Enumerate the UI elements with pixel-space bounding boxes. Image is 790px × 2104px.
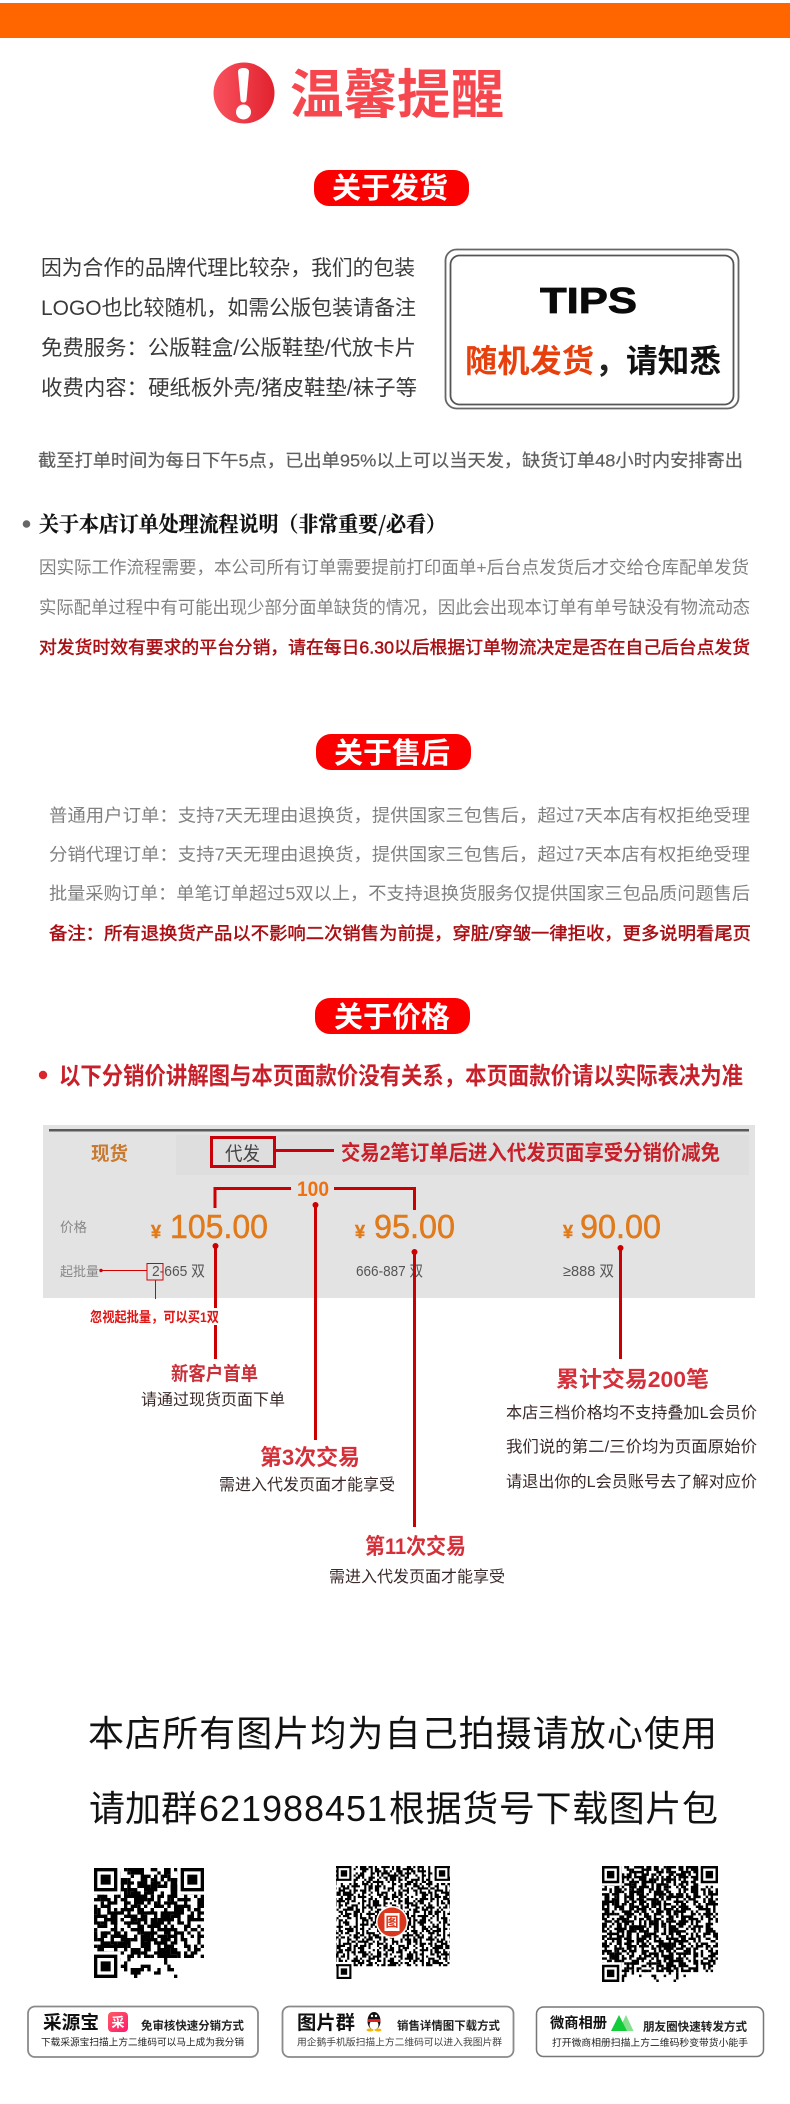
tab: dropship with highlight: 代发 <box>225 1143 260 1165</box>
shipping description text: 收费内容：硬纸板外壳/猪皮鞋垫/袜子等 <box>41 377 417 400</box>
tab: dropship with highlight <box>212 1138 274 1166</box>
shipping description text: LOGO也比较随机，如需公版包装请备注 <box>41 297 416 320</box>
price explainer panel <box>43 1125 755 1298</box>
callout: eleventh trade <box>329 1534 505 1586</box>
order process text: 对发货时效有要求的平台分销，请在每日6.30以后根据订单物流决定是否在自己后台点发货 <box>39 638 750 658</box>
after sales text: 普通用户订单：支持7天无理由退换货，提供国家三包售后，超过7天本店有权拒绝受理 <box>49 806 750 826</box>
card: wechat album: 微商相册 <box>550 2014 607 2032</box>
shipping description text: 因为合作的品牌代理比较杂，我们的包装 <box>41 257 415 280</box>
callout: cumulative 200: 本店三档价格均不支持叠加L会员价 <box>506 1404 757 1422</box>
tab: spot goods: 现货 <box>91 1142 128 1165</box>
after sales text: 批量采购订单：单笔订单超过5双以上，不支持退换货服务仅提供国家三包品质问题售后 <box>49 884 750 904</box>
price difference bracket: 100 <box>297 1178 329 1201</box>
photo usage note: 本店所有图片均为自己拍摄请放心使用 <box>88 1713 717 1754</box>
price 90: ¥ <box>563 1222 573 1242</box>
section heading: price <box>315 998 470 1034</box>
quantity ranges: 666-887 双 <box>356 1263 423 1280</box>
shipping description text: 免费服务：公版鞋盒/公版鞋垫/代放卡片 <box>41 337 416 360</box>
cutoff time note: 截至打单时间为每日下午5点，已出单95%以上可以当天发，缺货订单48小时内安排寄出 <box>38 450 743 470</box>
order process text <box>39 558 750 658</box>
quantity ranges: 2-665 双 <box>152 1263 205 1280</box>
callout: cumulative 200 <box>506 1367 757 1491</box>
QR code 3 <box>602 1866 718 1982</box>
order process text: 实际配单过程中有可能出现少部分面单缺货的情况，因此会出现本订单有单号缺没有物流动态 <box>39 598 750 618</box>
QR logo: 图 <box>386 1914 399 1930</box>
card: image group: 图片群 <box>297 2012 355 2034</box>
pointer lines <box>214 1204 622 1527</box>
title: 温馨提醒 <box>290 66 504 125</box>
image group note: 请加群 <box>89 1788 197 1829</box>
after sales text: 分销代理订单：支持7天无理由退换货，提供国家三包售后，超过7天本店有权拒绝受理 <box>49 845 750 865</box>
card: caiyuanbao <box>28 2006 258 2057</box>
section heading: shipping: 关于发货 <box>332 172 448 205</box>
price difference bracket <box>215 1178 414 1210</box>
price 90: 90.00 <box>580 1208 661 1245</box>
row label: price: 价格 <box>60 1220 87 1235</box>
row label: min order: 起批量 <box>60 1264 99 1279</box>
icon: penguin <box>366 2012 382 2032</box>
min-order highlight <box>100 1264 163 1299</box>
callout: cumulative 200: 请退出你的L会员账号去了解对应价 <box>506 1472 757 1491</box>
callout: third trade <box>219 1445 395 1494</box>
callout: first order <box>141 1362 285 1409</box>
after sales text: 备注：所有退换货产品以不影响二次销售为前提，穿脏/穿皱一律拒收，更多说明看尾页 <box>49 924 751 944</box>
card: image group: 销售详情图下载方式 <box>397 2018 500 2032</box>
section heading: price: 关于价格 <box>334 1001 450 1034</box>
section heading: after sales <box>316 734 471 770</box>
price 105: ¥ <box>151 1222 161 1242</box>
quantity ranges: ≥888 双 <box>563 1263 614 1280</box>
random shipping notice: ， <box>595 343 627 379</box>
callout: cumulative 200: 我们说的第二/三价均为页面原始价 <box>506 1438 757 1456</box>
after sales text <box>49 806 751 944</box>
tips card <box>446 250 738 408</box>
image group note: 621988451 <box>199 1788 387 1829</box>
order process heading: 关于本店订单处理流程说明（非常重要/必看） <box>39 508 446 538</box>
image group note: 根据货号下载图片包 <box>389 1788 718 1829</box>
callout: eleventh trade: 第11次交易 <box>365 1534 466 1559</box>
order process text: 因实际工作流程需要，本公司所有订单需要提前打印面单+后台点发货后才交给仓库配单发货 <box>39 558 749 578</box>
callout: cumulative 200: 累计交易200笔 <box>556 1367 709 1392</box>
quantity ranges <box>152 1263 614 1280</box>
tips label: TIPS <box>540 280 637 321</box>
callout: first order: 新客户首单 <box>171 1362 258 1385</box>
connector and note: 交易2笔订单后进入代发页面享受分销价减免 <box>341 1141 720 1165</box>
price 95: 95.00 <box>374 1208 455 1245</box>
card: image group: 用企鹅手机版扫描上方二维码可以进入我图片群 <box>297 2036 502 2048</box>
price 105: 105.00 <box>170 1208 268 1245</box>
card: image group <box>282 2006 514 2057</box>
section heading: after sales: 关于售后 <box>334 737 450 770</box>
top orange bar <box>0 3 790 38</box>
callout: eleventh trade: 需进入代发页面才能享受 <box>329 1568 505 1586</box>
card: caiyuanbao: 下载采源宝扫描上方二维码可以马上成为我分销 <box>41 2036 244 2048</box>
card: caiyuanbao: 免审核快速分销方式 <box>141 2018 244 2032</box>
card: wechat album: 朋友圈快速转发方式 <box>643 2020 748 2034</box>
image group note <box>89 1788 718 1829</box>
header: warm reminder <box>214 62 504 125</box>
card: caiyuanbao: 采源宝 <box>43 2012 99 2033</box>
QR code 2 <box>334 1866 452 1979</box>
icon: caiyuanbao logo: 采 <box>112 2015 125 2030</box>
min-order note: 忽视起批量，可以买1双 <box>90 1309 219 1325</box>
card: wechat album <box>536 2007 764 2056</box>
icon: green peaks <box>611 2015 634 2031</box>
card: wechat album: 打开微商相册扫描上方二维码秒变带货小能手 <box>552 2036 748 2049</box>
icon: exclamation <box>214 62 274 124</box>
random shipping notice: 请知悉 <box>626 343 721 379</box>
shipping description text <box>41 257 417 400</box>
random shipping notice: 随机发货 <box>465 343 594 379</box>
QR code 1 <box>94 1868 204 1978</box>
random shipping notice <box>465 343 721 379</box>
callout: third trade: 第3次交易 <box>260 1445 360 1470</box>
callout: third trade: 需进入代发页面才能享受 <box>219 1476 395 1494</box>
icon: caiyuanbao logo <box>108 2012 128 2032</box>
section heading: shipping <box>314 170 469 206</box>
price 95: ¥ <box>355 1222 365 1242</box>
callout: first order: 请通过现货页面下单 <box>141 1391 285 1409</box>
